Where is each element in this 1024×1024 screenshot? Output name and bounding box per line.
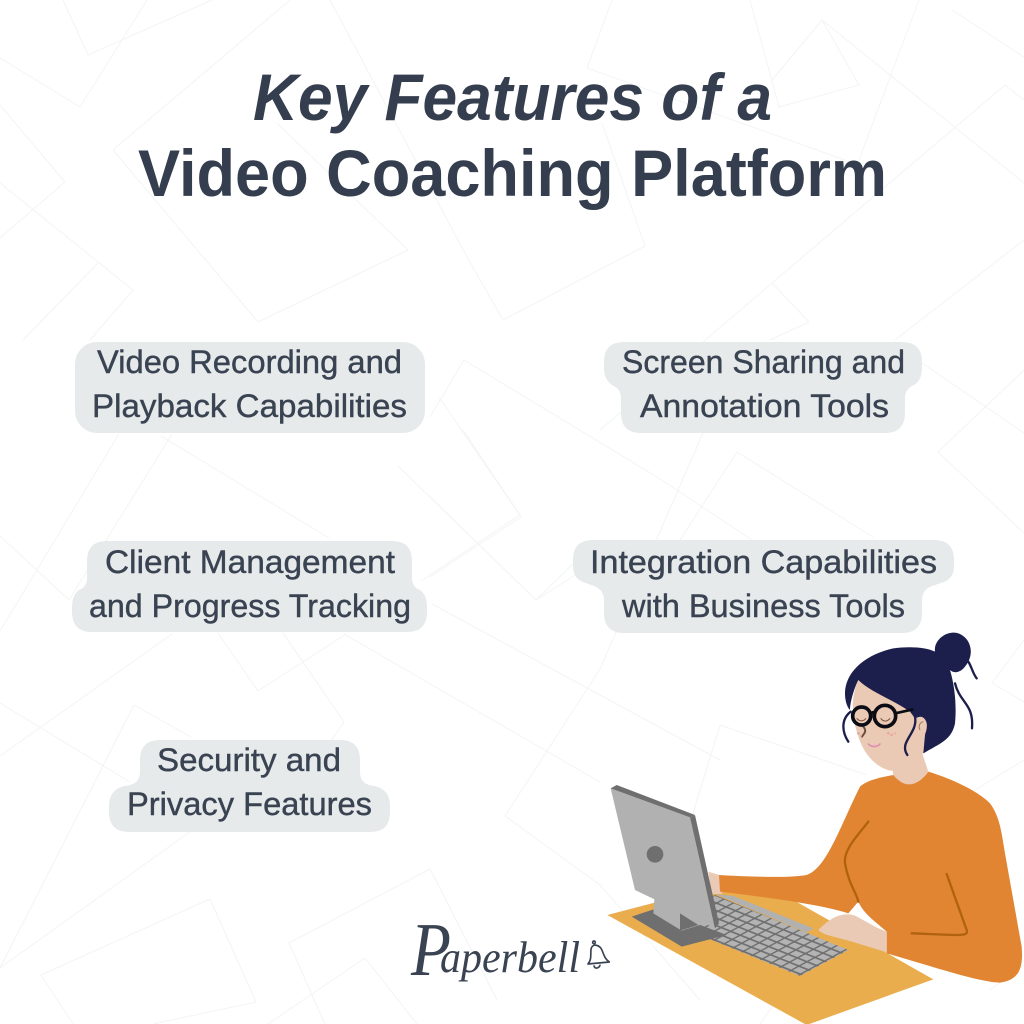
feature: screen sharing: [604, 342, 922, 433]
feature: client management: Client Management: [105, 544, 395, 580]
ear: [916, 717, 927, 737]
front wisp: [862, 727, 865, 737]
feature: video recording: Playback Capabilities: [92, 388, 407, 424]
feature: integration: [573, 540, 954, 633]
feature: client management: [72, 541, 427, 632]
feature: video recording: Video Recording and: [97, 344, 402, 380]
smile: [868, 744, 880, 746]
logo: Paperbell: P: [410, 908, 451, 992]
keyboard: [667, 894, 848, 976]
logo: Paperbell: aperbell: [440, 933, 580, 982]
feature: integration: Integration Capabilities: [590, 544, 937, 580]
woman's far hand: [708, 872, 722, 894]
title line 2: Video Coaching Platform: [138, 136, 887, 210]
feature: integration: with Business Tools: [621, 588, 905, 624]
feature: security: Privacy Features: [127, 786, 372, 822]
desk: [607, 877, 933, 1024]
icon: bell: [588, 941, 609, 968]
freckles: [857, 732, 896, 737]
feature: screen sharing: Annotation Tools: [640, 388, 889, 424]
closed eyes: [857, 718, 890, 721]
logo: Paperbell: [410, 908, 609, 992]
feature: screen sharing: Screen Sharing and: [622, 344, 905, 380]
face: [853, 680, 930, 771]
sweater fold lines: [845, 822, 967, 935]
near hand: [818, 914, 887, 952]
feature: client management: and Progress Tracking: [89, 588, 411, 624]
neck: [892, 752, 928, 784]
sweater: [719, 772, 1022, 983]
hair: [845, 633, 971, 753]
title line 1: Key Features of a: [253, 60, 772, 134]
illustration: woman at computer: [607, 633, 1022, 1024]
glasses: [853, 705, 913, 727]
title: [138, 60, 887, 210]
feature: security: [109, 740, 390, 832]
feature: security: Security and: [157, 742, 341, 778]
hair wisps: [843, 662, 977, 755]
monitor: [611, 785, 727, 947]
feature: video recording: [75, 342, 425, 433]
